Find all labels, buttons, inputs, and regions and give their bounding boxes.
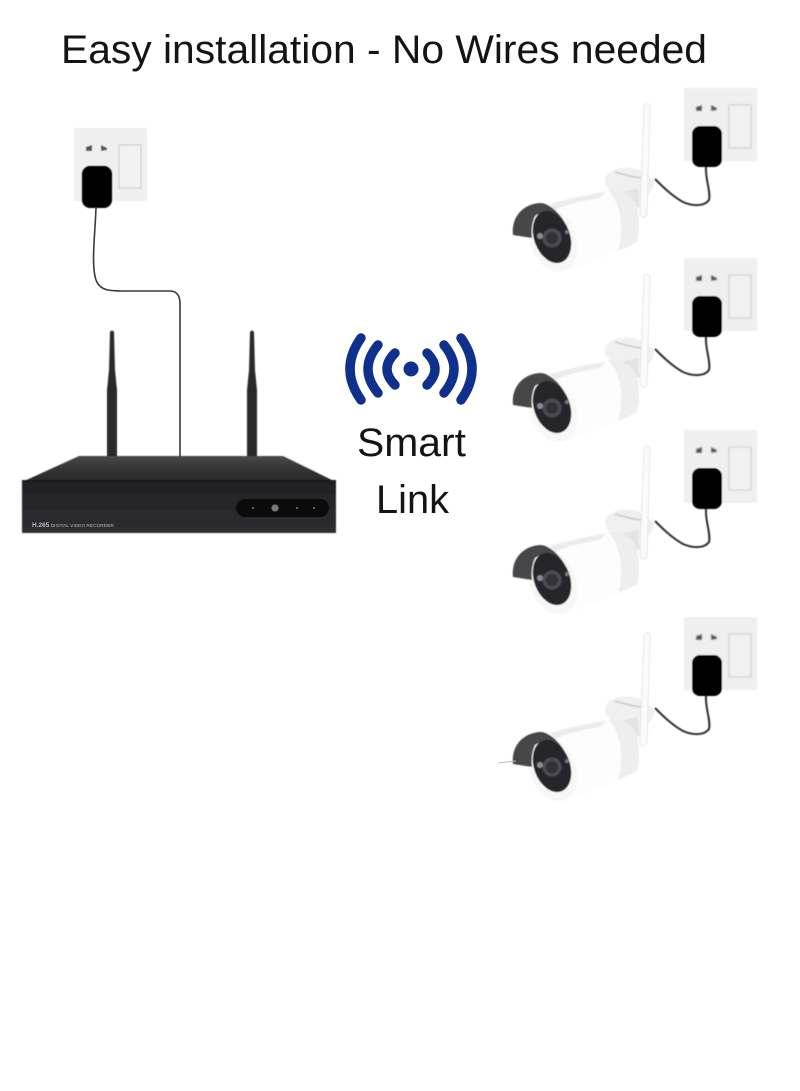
camera 1 [513,88,757,279]
recorder label: H.265 DIGITAL VIDEO RECORDER [32,522,114,529]
wall socket with power adapter for recorder [74,128,180,458]
power cable to recorder [94,208,180,458]
title: Easy installation - No Wires needed [61,28,707,72]
antennas [107,330,257,462]
camera 3 [513,430,757,621]
front button panel [236,499,329,517]
camera 4 [498,617,757,808]
text: Link [376,478,450,522]
recorder body [22,456,336,533]
camera 2 [513,258,757,449]
smart link label: Smart [357,421,466,465]
video recorder with antennas [22,330,336,533]
wireless icon [350,338,472,400]
